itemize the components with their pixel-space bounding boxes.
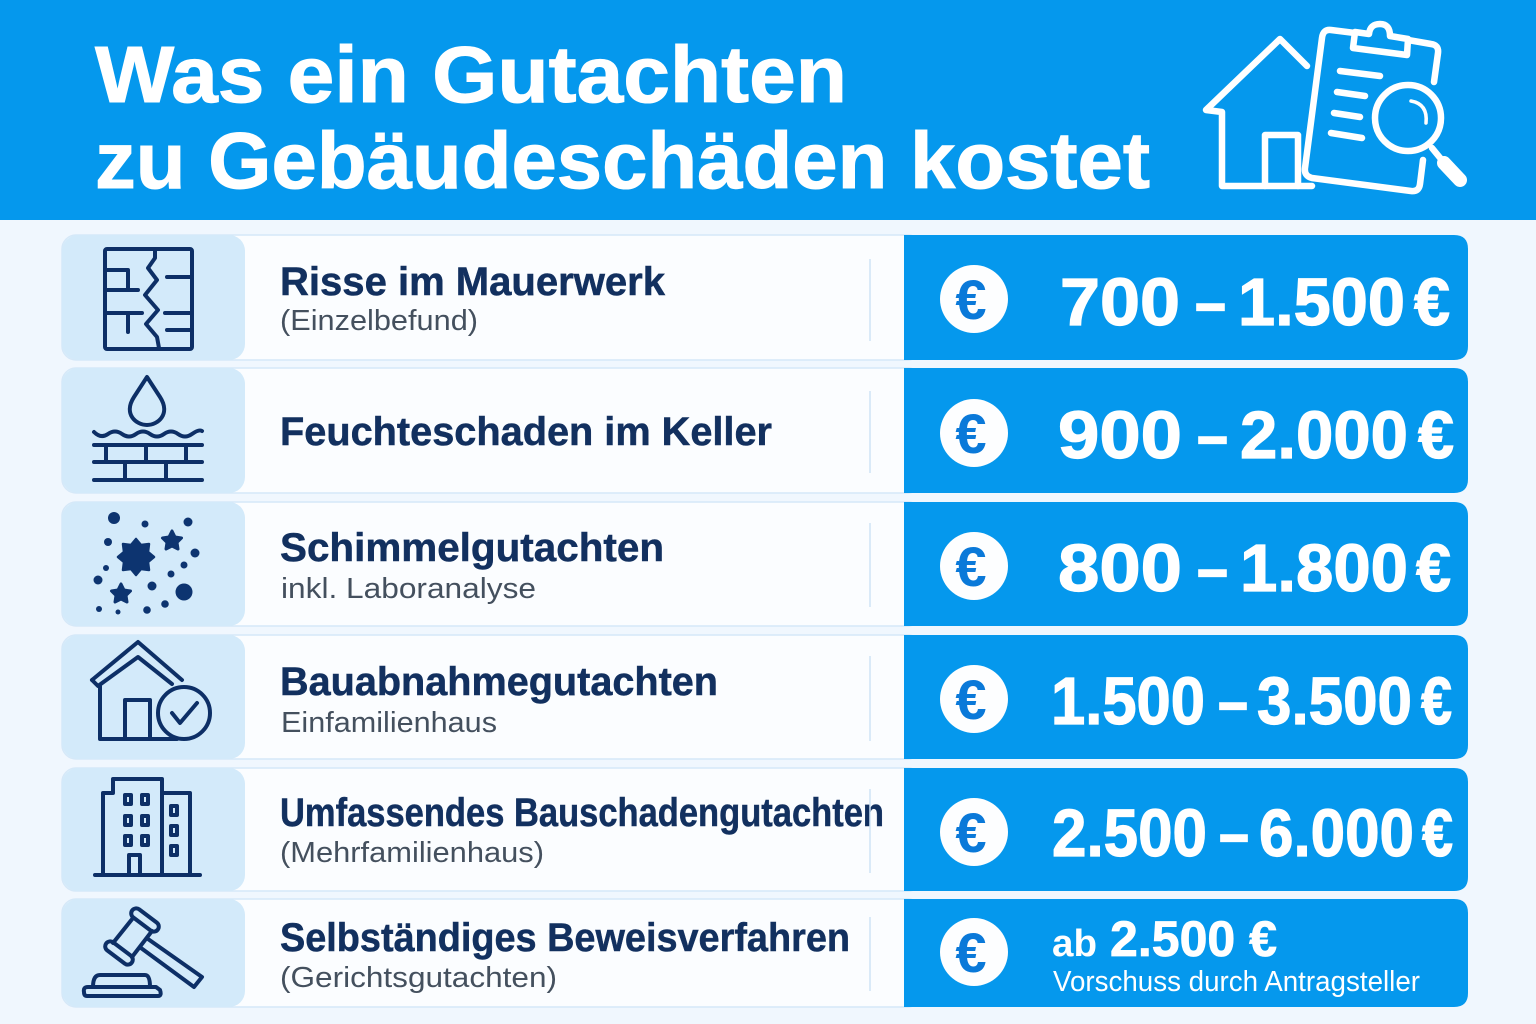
row 3 euro badge: € <box>955 535 987 598</box>
row 4 label <box>280 660 718 739</box>
row 5 euro badge <box>940 798 1008 866</box>
row 2 icon panel <box>62 368 245 493</box>
row 6 euro badge: € <box>955 921 987 984</box>
row 6 icon panel <box>62 899 245 1007</box>
icon: apartment building <box>95 779 200 875</box>
row 1 euro badge <box>940 265 1008 333</box>
row 6 card <box>62 899 922 1007</box>
row 3 euro badge <box>940 532 1008 600</box>
row 2 price: – <box>1197 398 1228 473</box>
row 2: Feuchteschaden im Keller <box>62 368 1468 493</box>
row 1 label: Risse im Mauerwerk <box>280 260 666 304</box>
row 3 label: Schimmelgutachten <box>280 526 664 570</box>
row 5 price: 2.500 <box>1052 796 1207 871</box>
icon: house with check mark <box>92 642 210 739</box>
row 5 card <box>62 768 922 891</box>
row 5 price: – <box>1219 796 1249 871</box>
row 1 price box <box>904 235 1468 360</box>
row 5 price <box>1052 796 1453 871</box>
row 3 price <box>1058 531 1451 606</box>
icon: house with clipboard and magnifier <box>1206 24 1460 191</box>
row 6 label: Selbständiges Beweisverfahren <box>280 916 850 960</box>
row 4 label: Bauabnahmegutachten <box>280 660 718 704</box>
row 3 label <box>280 526 664 605</box>
row 2 price <box>1058 398 1454 473</box>
icon: mould spores <box>94 512 200 614</box>
row 6: Selbständiges Beweisverfahren <box>62 899 1468 1007</box>
row 4 price: 1.500 <box>1051 664 1205 739</box>
row 3 price box <box>904 502 1468 626</box>
row 6 price <box>1052 911 1420 998</box>
row 5 euro badge: € <box>955 801 987 864</box>
icon: cracked wall <box>105 249 192 349</box>
title: Was ein Gutachten <box>95 30 847 119</box>
row 3 price: 1.800 <box>1240 531 1408 606</box>
row 5 label <box>280 791 884 869</box>
row 4: Bauabnahmegutachten <box>62 635 1468 759</box>
dividers <box>869 259 871 991</box>
row 2 price: 2.000 <box>1240 398 1408 473</box>
row 3 price: 800 <box>1058 531 1182 606</box>
row 2 label: Feuchteschaden im Keller <box>280 410 772 454</box>
row 3 card <box>62 502 922 626</box>
row 2 euro badge <box>940 399 1008 467</box>
icon: judge gavel <box>84 906 202 996</box>
row 5: Umfassendes Bauschadengutachten <box>62 768 1468 891</box>
row 4 price box <box>904 635 1468 759</box>
row 4 price: € <box>1421 664 1452 739</box>
row 1: Risse im Mauerwerk <box>62 235 1468 360</box>
row 3 label: inkl. Laboranalyse <box>281 573 536 605</box>
row 4 price <box>1051 664 1452 739</box>
row 1 price: 700 <box>1060 265 1180 340</box>
row 2 price: 900 <box>1058 398 1182 473</box>
row 2 price: € <box>1418 398 1454 473</box>
row 3 price: – <box>1197 531 1228 606</box>
row 6 price box <box>904 899 1468 1007</box>
row 6 label <box>280 916 850 994</box>
row 3 price: € <box>1416 531 1451 606</box>
row 4 price: – <box>1218 664 1248 739</box>
row 3 icon panel <box>62 502 245 626</box>
row 1 price: 1.500 <box>1238 265 1405 340</box>
row 2 euro badge: € <box>955 402 987 465</box>
row 3: Schimmelgutachten <box>62 502 1468 626</box>
row 4 euro badge: € <box>955 668 987 731</box>
icon: water drop over brick wall <box>94 377 202 480</box>
row 4 card <box>62 635 922 759</box>
row 6 price: Vorschuss durch Antragsteller <box>1053 966 1420 998</box>
row 4 euro badge <box>940 665 1008 733</box>
row 5 price: 6.000 <box>1259 796 1414 871</box>
row 1 price <box>1060 265 1450 340</box>
row 6 price: ab <box>1052 923 1097 965</box>
row 5 label: (Mehrfamilienhaus) <box>280 837 544 869</box>
row 6 label: (Gerichtsgutachten) <box>280 962 557 994</box>
title <box>95 30 1150 205</box>
row 1 price: – <box>1195 265 1226 340</box>
row 1 icon panel <box>62 235 245 360</box>
row 6 euro badge <box>940 918 1008 986</box>
row 2 card <box>62 368 922 493</box>
row 6 price: 2.500 € <box>1110 911 1277 967</box>
row 5 label: Umfassendes Bauschadengutachten <box>280 791 884 835</box>
row 1 euro badge: € <box>955 268 987 331</box>
row 4 label: Einfamilienhaus <box>281 707 497 739</box>
row 2 price box <box>904 368 1468 493</box>
row 1 card <box>62 235 922 360</box>
title: zu Gebäudeschäden kostet <box>95 116 1150 205</box>
row 5 price: € <box>1422 796 1453 871</box>
row 5 icon panel <box>62 768 245 891</box>
row 4 price: 3.500 <box>1257 664 1412 739</box>
row 1 price: € <box>1414 265 1450 340</box>
header band <box>0 0 1536 220</box>
row 5 price box <box>904 768 1468 891</box>
row 4 icon panel <box>62 635 245 759</box>
row 1 label <box>280 260 666 337</box>
row 1 label: (Einzelbefund) <box>280 305 478 337</box>
